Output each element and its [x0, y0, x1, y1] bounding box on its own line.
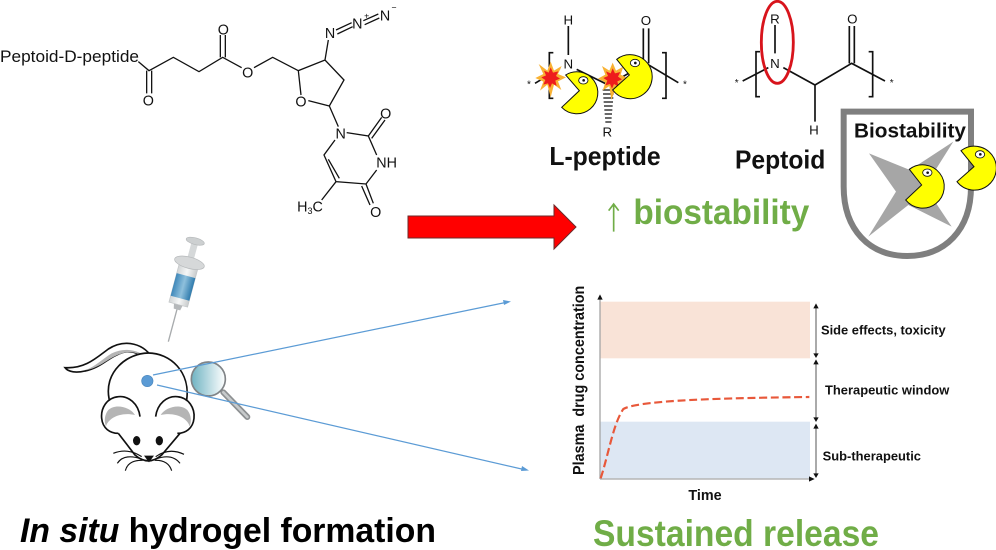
- mouse scene: [65, 234, 247, 471]
- caption: in situ hydrogel formation: In situ hydrogel formation: [20, 512, 436, 550]
- molecule atom labels: 3: [307, 206, 312, 216]
- label: side effects: Side effects, toxicity: [821, 322, 946, 337]
- pacman enzyme in shield: [906, 165, 944, 208]
- range arrows: [813, 303, 819, 478]
- L-peptide structure: [527, 13, 687, 140]
- shield icon: Biostability: [854, 119, 966, 142]
- mouse tail: [65, 343, 153, 372]
- label: sub-therapeutic: Sub-therapeutic: [823, 449, 921, 464]
- molecule atom labels: NH: [376, 156, 397, 172]
- peptoid structure: *: [890, 78, 894, 89]
- mouse right ear: [156, 397, 194, 433]
- chart axes: [597, 294, 815, 482]
- molecule atom labels: O: [380, 107, 391, 123]
- red arrow: [408, 205, 576, 249]
- molecule atom labels: O: [370, 205, 381, 221]
- shield icon: [844, 112, 971, 256]
- mouse nose: [144, 456, 154, 462]
- label: Peptoid-D-peptide: Peptoid-D-peptide: [0, 48, 139, 66]
- band: toxicity: [600, 302, 810, 358]
- mouse body: [108, 353, 187, 461]
- L-peptide structure: H: [564, 13, 573, 28]
- peptoid structure: *: [735, 78, 739, 89]
- zoom line upper arrow: [153, 300, 511, 375]
- peptoid structure: [735, 12, 894, 138]
- molecule atom labels: +: [364, 10, 369, 20]
- molecule atom labels: O: [242, 66, 253, 82]
- L-peptide structure: N: [564, 56, 573, 71]
- pacman enzyme outside shield: [957, 146, 996, 190]
- L-peptide structure: *: [527, 79, 531, 90]
- label: therapeutic window: Therapeutic window: [825, 382, 950, 397]
- icon: mouse: [65, 343, 194, 471]
- pacman enzyme 1: [562, 72, 598, 114]
- label: L-peptide: L-peptide: [549, 141, 661, 171]
- molecule atom labels: [143, 3, 397, 221]
- molecule: peptoid-D-peptide AZT conjugate: [138, 3, 397, 221]
- explosion right: [598, 63, 628, 100]
- blue injection site dot: [142, 375, 153, 387]
- peptoid structure: R: [770, 12, 780, 27]
- heading: increased biostability: biostability: [633, 193, 810, 232]
- molecule atom labels: O: [218, 23, 229, 39]
- right top structures: [527, 1, 996, 256]
- molecule bonds: [138, 14, 385, 205]
- chart: plasma drug concentration over time: [571, 286, 950, 504]
- molecule atom labels: O: [295, 94, 307, 110]
- molecule atom labels: H: [297, 199, 307, 215]
- mouse eyes: [133, 436, 140, 445]
- release curve: [601, 397, 809, 478]
- L-peptide structure: *: [683, 79, 687, 90]
- molecule atom labels: N: [380, 8, 390, 24]
- molecule atom labels: N: [352, 17, 363, 33]
- L-peptide structure: O: [641, 13, 651, 28]
- pacman enzyme 2: [613, 55, 652, 99]
- icon: magnifying glass: [191, 362, 247, 417]
- peptoid structure: H: [809, 123, 819, 138]
- icon: syringe: [154, 234, 211, 346]
- label: y axis: Plasma drug concentration: [571, 286, 588, 475]
- band: sub-therapeutic: [600, 422, 810, 478]
- mouse left ear: [102, 397, 140, 433]
- molecule atom labels: C: [312, 199, 323, 215]
- molecule atom labels: O: [143, 93, 154, 109]
- molecule atom labels: −: [391, 3, 397, 13]
- zoom line lower arrow: [157, 385, 529, 471]
- peptoid structure: N: [770, 56, 780, 71]
- label: time axis: Time: [688, 488, 722, 504]
- mouse whiskers: [113, 451, 184, 471]
- red ellipse highlight on R group: [761, 1, 793, 83]
- molecule atom labels: N: [325, 26, 335, 42]
- peptoid structure: O: [847, 12, 858, 27]
- L-peptide structure: R: [603, 125, 612, 140]
- explosion left: [535, 62, 566, 97]
- label: Peptoid: Peptoid: [735, 144, 825, 174]
- molecule atom labels: N: [335, 126, 346, 142]
